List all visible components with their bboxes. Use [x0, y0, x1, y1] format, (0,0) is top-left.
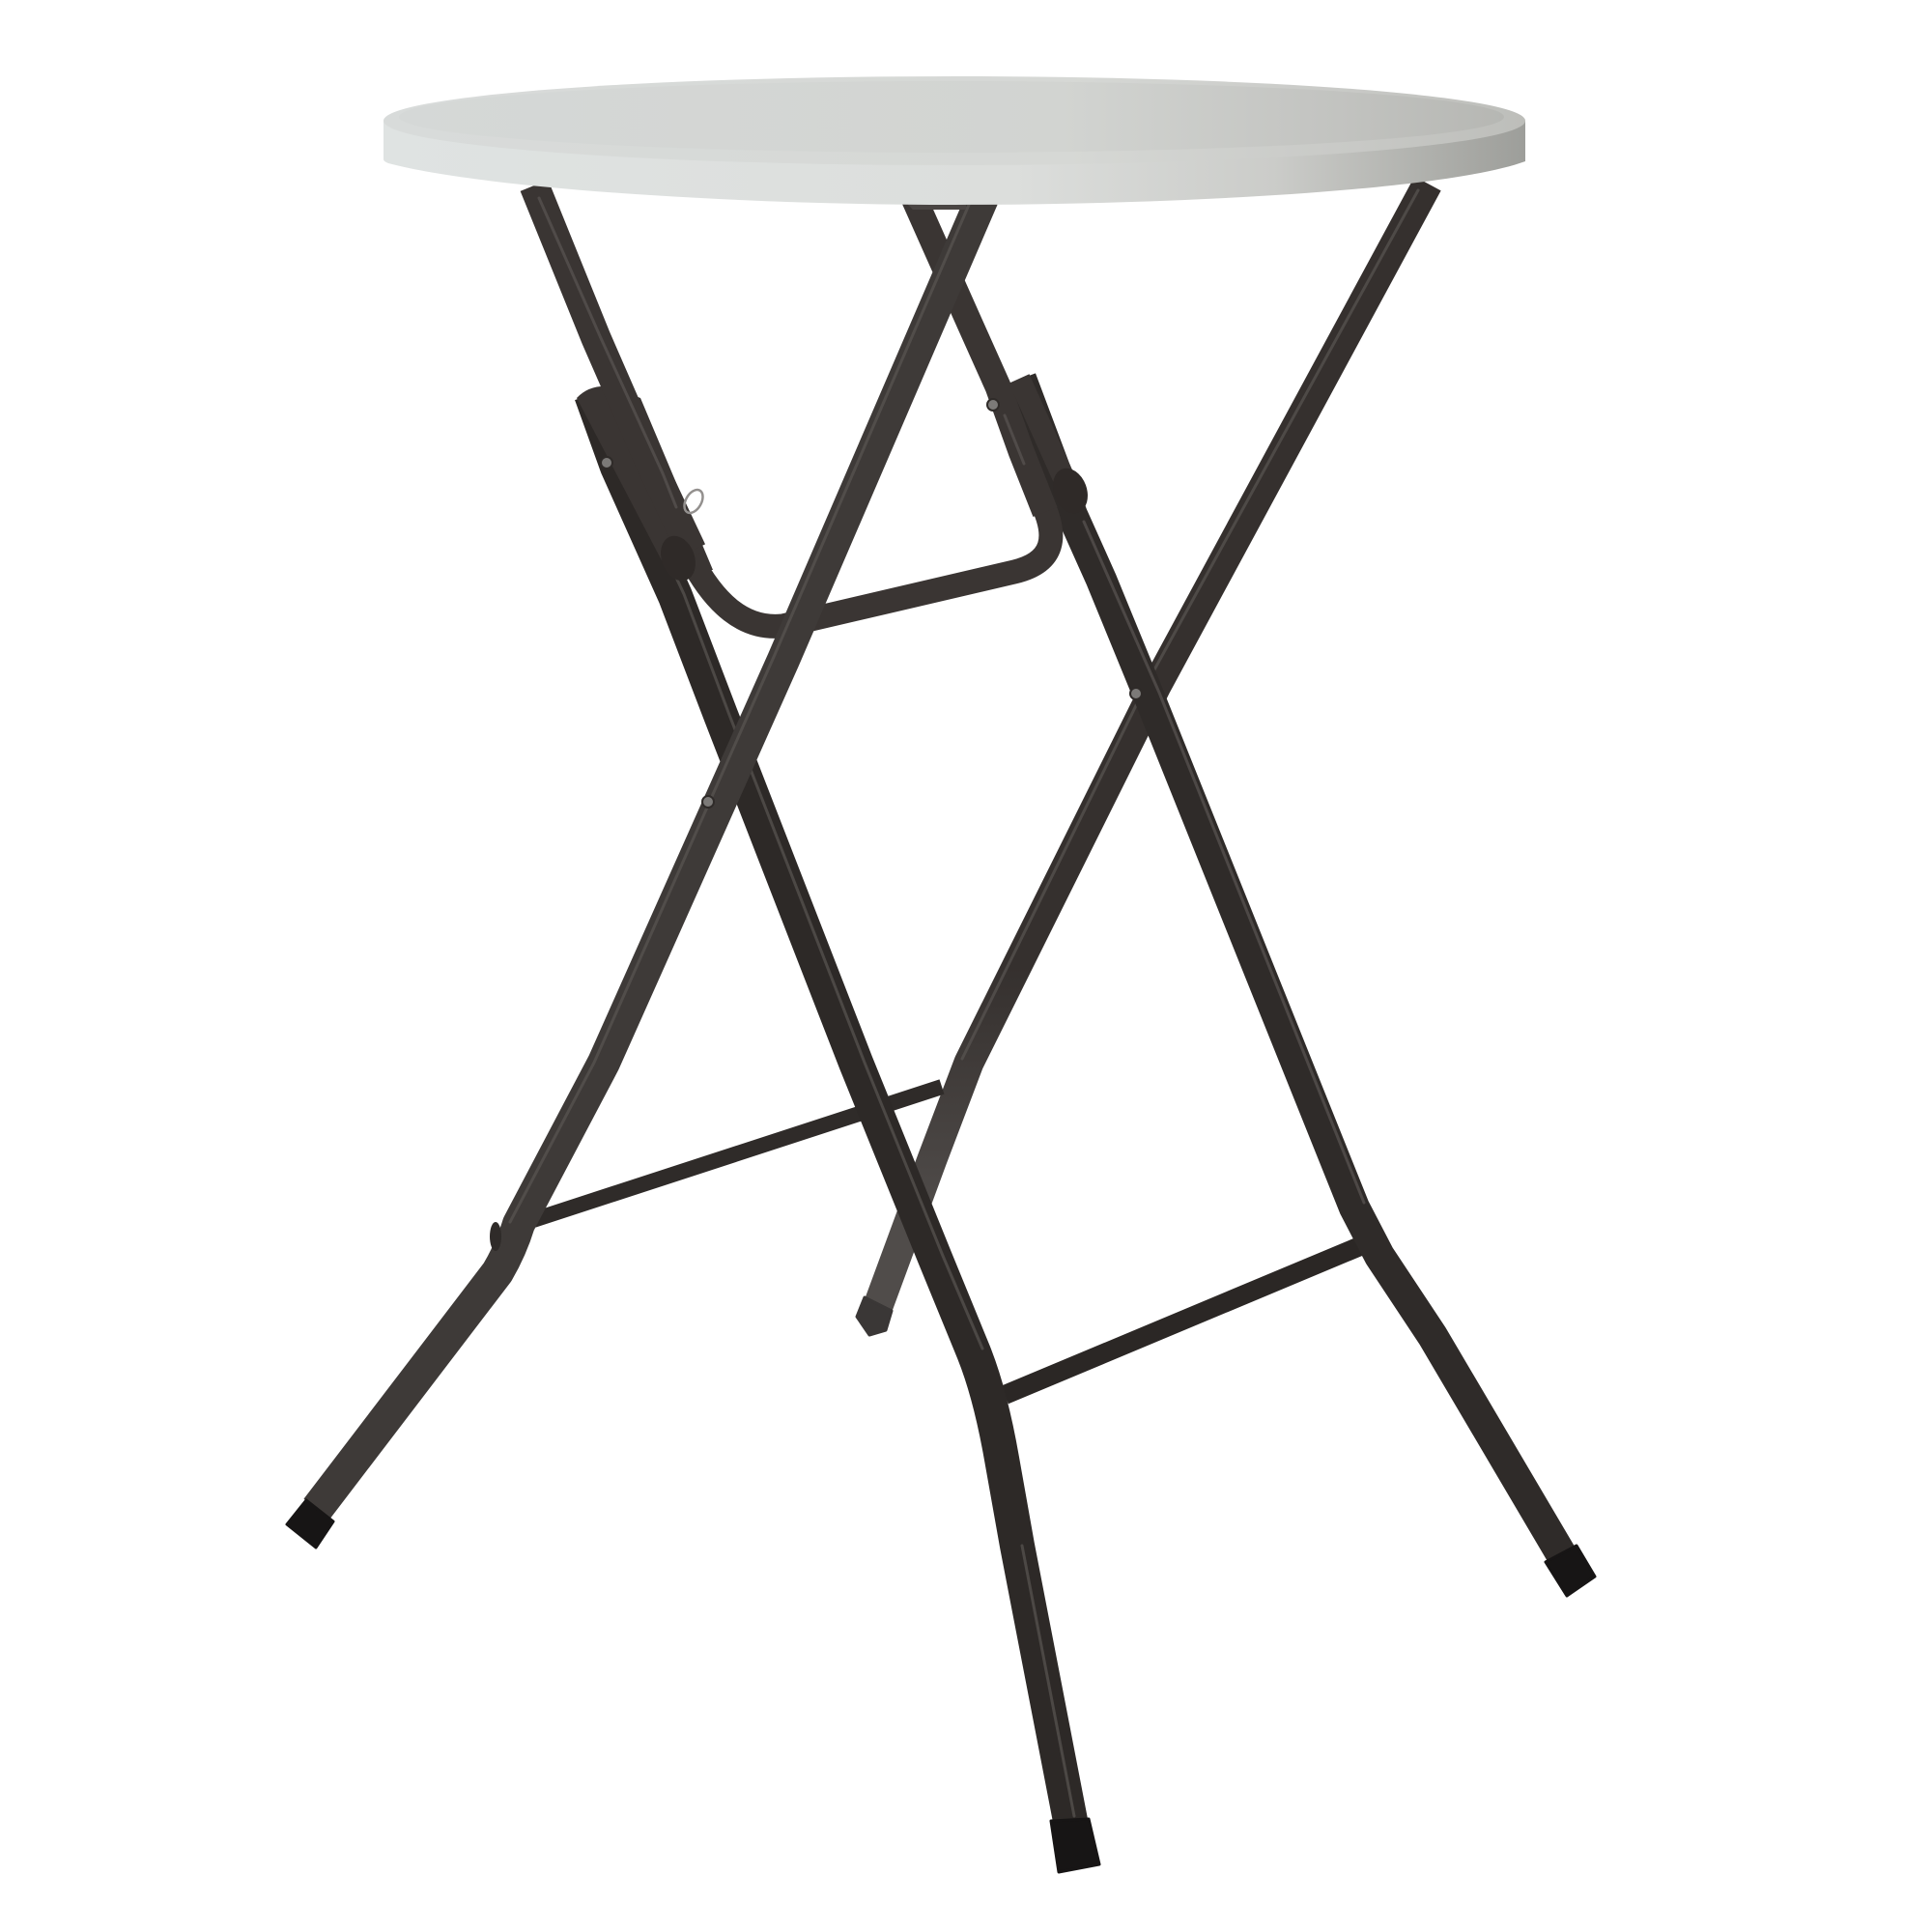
rivet: left sleeve — [601, 457, 612, 469]
lower crossbar: rear — [533, 1087, 942, 1220]
pull ring — [681, 487, 706, 516]
foot cap: rear foot — [857, 1297, 892, 1335]
upper leg arms joined to the hoop — [534, 185, 1045, 551]
tabletop inner recess — [399, 81, 1504, 153]
right sleeve bracket — [987, 379, 1094, 518]
left hinge plate — [655, 487, 706, 585]
upper arm: centre — [914, 198, 1045, 512]
tabletop rim — [384, 121, 1525, 205]
foot cap: right foot — [1546, 1546, 1595, 1596]
lower crossbar: front — [1005, 1241, 1372, 1395]
rivet: right crossing — [1130, 688, 1142, 699]
folding brace hoop — [691, 499, 1051, 626]
rivet: left crossing — [702, 796, 714, 808]
back leg: right top to rear foot — [857, 184, 1428, 1335]
back leg: lower right section to right foot — [1021, 379, 1595, 1596]
round tabletop — [384, 76, 1525, 205]
top bracket under table — [901, 198, 966, 210]
foot cap: left foot — [287, 1500, 333, 1548]
left sleeve filler between arm and lower leg — [577, 386, 713, 570]
bump at hinge — [490, 1222, 501, 1251]
hinge plate: right — [1047, 464, 1094, 518]
rivet: right bracket — [987, 399, 999, 411]
upper arm: left — [534, 185, 692, 551]
foot cap: front foot — [1051, 1819, 1099, 1872]
tabletop surface — [384, 76, 1525, 165]
front leg: centre top to left foot — [287, 198, 982, 1548]
front leg: lower section to front foot — [591, 394, 1099, 1872]
